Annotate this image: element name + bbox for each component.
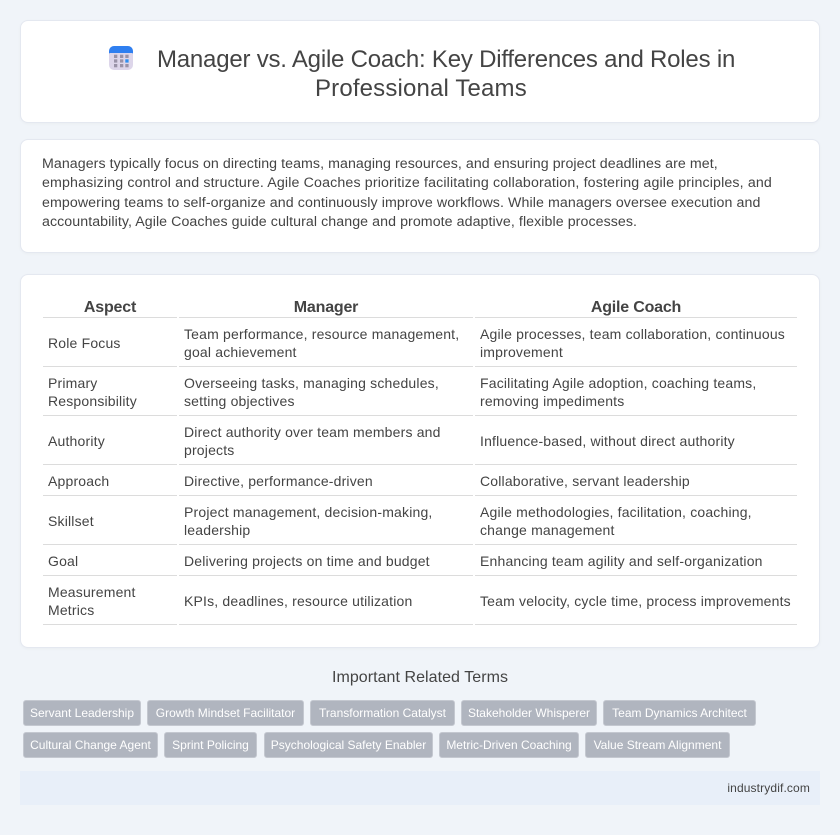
tag xyxy=(23,700,141,726)
text block: summary: emphasizing control and structure. Agile Coaches prioritize facilitating collaboration, fostering agile principles, and xyxy=(42,175,772,191)
cell: Responsibility manager xyxy=(184,375,439,409)
row: Authority: Authority xyxy=(48,433,105,449)
row: Primary Responsibility: Responsibility xyxy=(48,393,137,409)
tag xyxy=(264,732,433,758)
text block: summary: accountability, Agile Coaches guide cultural change and promote adaptive, flexible processes. xyxy=(42,214,637,230)
cell: Role Focus manager: goal achievement xyxy=(184,344,297,360)
cell: Role Focus coach: improvement xyxy=(480,344,563,360)
row: Goal: Goal xyxy=(48,553,78,569)
footer source text: industrydif.com xyxy=(727,781,810,795)
cell: Responsibility coach: removing impediments xyxy=(480,393,624,409)
tag xyxy=(310,700,455,726)
cell: Responsibility manager: Overseeing tasks, managing schedules, xyxy=(184,375,439,391)
tag: Servant Leadership xyxy=(30,706,134,720)
row: Measurement Metrics: Metrics xyxy=(48,602,94,618)
cell: Goal coach: Enhancing team agility and self-organization xyxy=(480,553,763,569)
tag: Value Stream Alignment xyxy=(594,738,721,752)
tag xyxy=(439,732,579,758)
cell: Metrics manager: KPIs, deadlines, resource utilization xyxy=(184,593,412,609)
table header: Agile Coach: Agile Coach xyxy=(591,299,681,316)
row: Measurement Metrics xyxy=(48,584,136,618)
panel: summary card xyxy=(20,139,820,253)
tag xyxy=(23,732,158,758)
cell: Goal manager: Delivering projects on time and budget xyxy=(184,553,430,569)
tag: Cultural Change Agent xyxy=(30,738,151,752)
cell: Responsibility manager: setting objectives xyxy=(184,393,295,409)
cell: Role Focus coach: Agile processes, team collaboration, continuous xyxy=(480,326,785,342)
cell: Metrics coach: Team velocity, cycle time, process improvements xyxy=(480,593,791,609)
cell: Skillset coach: Agile methodologies, facilitation, coaching, xyxy=(480,504,752,520)
icon: calendar xyxy=(109,46,133,70)
table header: Aspect: Aspect xyxy=(84,299,136,316)
tag: Metric-Driven Coaching xyxy=(446,738,572,752)
cell: Skillset manager: Project management, decision-making, xyxy=(184,504,432,520)
cell: Authority manager: projects xyxy=(184,442,234,458)
tag xyxy=(461,700,597,726)
row: Role Focus: Role Focus xyxy=(48,335,121,351)
tag xyxy=(603,700,756,726)
table header: Manager: Manager xyxy=(294,299,358,316)
row: Skillset: Skillset xyxy=(48,513,94,529)
row: Primary Responsibility xyxy=(48,375,137,409)
cell: Authority coach: Influence-based, without direct authority xyxy=(480,433,735,449)
cell: Skillset manager: leadership xyxy=(184,522,250,538)
tag: Psychological Safety Enabler xyxy=(271,738,426,752)
tag xyxy=(585,732,730,758)
title xyxy=(157,46,735,102)
cell: Role Focus coach xyxy=(480,326,785,360)
heading: related terms: Important Related Terms xyxy=(332,669,508,686)
cell: Authority manager: Direct authority over team members and xyxy=(184,424,441,440)
cell: Skillset manager xyxy=(184,504,432,538)
row: Approach: Approach xyxy=(48,473,109,489)
text block: summary xyxy=(42,156,772,230)
panel: comparison table xyxy=(20,274,820,648)
tag: Sprint Policing xyxy=(172,738,249,752)
tag: Growth Mindset Facilitator xyxy=(156,706,295,720)
tag: Team Dynamics Architect xyxy=(612,706,747,720)
cell: Skillset coach: change management xyxy=(480,522,615,538)
title: Manager vs. Agile Coach: Key Differences and Roles in xyxy=(157,46,735,73)
row: Primary Responsibility: Primary xyxy=(48,375,97,391)
tag: Stakeholder Whisperer xyxy=(468,706,590,720)
cell: Approach manager: Directive, performance-driven xyxy=(184,473,373,489)
text block: summary: empowering teams to self-organize and continuously improve workflows. While managers oversee execution and xyxy=(42,195,760,211)
title: Professional Teams xyxy=(315,75,527,102)
footer bar xyxy=(20,771,820,805)
cell: Skillset coach xyxy=(480,504,752,538)
tag xyxy=(147,700,304,726)
row: Measurement Metrics: Measurement xyxy=(48,584,136,600)
tag xyxy=(164,732,257,758)
text block: summary: Managers typically focus on directing teams, managing resources, and ensuring project deadlines are met, xyxy=(42,156,718,172)
tag: Transformation Catalyst xyxy=(319,706,446,720)
cell: Role Focus manager xyxy=(184,326,459,360)
cell: Responsibility coach: Facilitating Agile adoption, coaching teams, xyxy=(480,375,756,391)
cell: Role Focus manager: Team performance, resource management, xyxy=(184,326,459,342)
panel: title card xyxy=(20,20,820,123)
cell: Responsibility coach xyxy=(480,375,756,409)
cell: Authority manager xyxy=(184,424,441,458)
cell: Approach coach: Collaborative, servant leadership xyxy=(480,473,690,489)
